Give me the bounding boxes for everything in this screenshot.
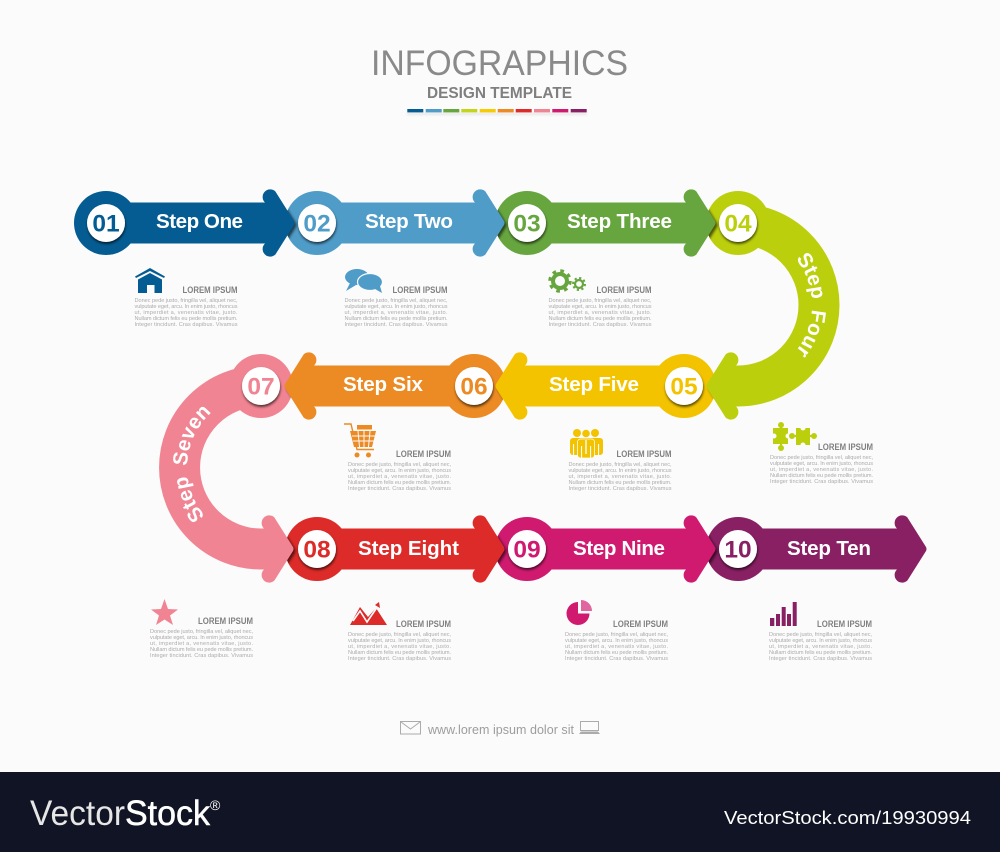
title bbox=[371, 44, 628, 102]
text block: step 3: vulputate eget, arcu. In enim justo, rhoncus bbox=[548, 304, 652, 310]
icon: home bbox=[135, 268, 165, 293]
text block: step 7: Nullam dictum felis eu pede mollis pretium. bbox=[150, 647, 253, 653]
text block: step 4: LOREM IPSUM bbox=[818, 442, 873, 452]
step 3 arrow: 03 bbox=[513, 210, 541, 238]
text block: step 6: ut, imperdiet a, venenatis vitae, justo. bbox=[348, 474, 451, 480]
text block: step 1 bbox=[134, 285, 238, 328]
text block: step 10: Nullam dictum felis eu pede mollis pretium. bbox=[769, 650, 872, 656]
text block: step 8: Donec pede justo, fringilla vel, aliquet nec, bbox=[348, 632, 451, 638]
step 1 arrow bbox=[74, 189, 294, 257]
icon: star bbox=[151, 599, 178, 625]
text block: step 2: Donec pede justo, fringilla vel, aliquet nec, bbox=[344, 298, 448, 304]
text block: step 6 bbox=[348, 449, 451, 492]
step 2 arrow bbox=[288, 189, 504, 257]
text block: step 3 bbox=[548, 285, 652, 328]
text block: step 4: Integer tincidunt. Cras dapibus. Vivamus bbox=[770, 479, 873, 485]
text block: step 1: Donec pede justo, fringilla vel, aliquet nec, bbox=[134, 298, 238, 304]
text block: step 9 bbox=[565, 619, 668, 662]
text block: step 9: LOREM IPSUM bbox=[613, 619, 668, 629]
colour legend bars bbox=[407, 109, 587, 115]
text block: step 4: vulputate eget, arcu. In enim justo, rhoncus bbox=[770, 461, 873, 467]
text block: step 1: Nullam dictum felis eu pede mollis pretium. bbox=[134, 316, 238, 322]
text block: step 9: ut, imperdiet a, venenatis vitae, justo. bbox=[565, 644, 668, 650]
text block: step 2: Integer tincidunt. Cras dapibus. Vivamus bbox=[344, 322, 448, 328]
step 2 arrow: Step Two bbox=[365, 210, 453, 233]
text block: step 10 bbox=[769, 619, 872, 662]
text block: step 1: vulputate eget, arcu. In enim justo, rhoncus bbox=[134, 304, 238, 310]
text block: step 5: Donec pede justo, fringilla vel, aliquet nec, bbox=[568, 462, 672, 468]
text block: step 8: Nullam dictum felis eu pede mollis pretium. bbox=[348, 650, 451, 656]
step 9 arrow: 09 bbox=[513, 536, 541, 564]
text block: step 7: LOREM IPSUM bbox=[198, 616, 253, 626]
text block: step 2: vulputate eget, arcu. In enim justo, rhoncus bbox=[344, 304, 448, 310]
text block: step 2: ut, imperdiet a, venenatis vitae, justo. bbox=[344, 310, 448, 316]
text block: step 10: Integer tincidunt. Cras dapibus. Vivamus bbox=[769, 656, 872, 662]
text block: step 7: ut, imperdiet a, venenatis vitae, justo. bbox=[150, 641, 253, 647]
text block: step 9: Integer tincidunt. Cras dapibus. Vivamus bbox=[565, 656, 668, 662]
step 7 curved arrow: 07 bbox=[247, 374, 275, 400]
text block: step 7: Donec pede justo, fringilla vel, aliquet nec, bbox=[150, 629, 253, 635]
step 10 arrow: 10 bbox=[724, 536, 752, 564]
step 9 arrow bbox=[498, 515, 716, 583]
text block: step 8: LOREM IPSUM bbox=[396, 619, 451, 629]
step 5 arrow: 05 bbox=[670, 374, 698, 400]
text block: step 8 bbox=[348, 619, 451, 662]
text block: step 2 bbox=[344, 285, 448, 328]
icon: laptop bbox=[579, 722, 600, 734]
text block: step 9: Donec pede justo, fringilla vel, aliquet nec, bbox=[565, 632, 668, 638]
icon: envelope bbox=[400, 722, 420, 734]
step 7 curved arrow bbox=[159, 354, 294, 583]
step 3 arrow: Step Three bbox=[567, 210, 672, 233]
text block: step 5 bbox=[568, 449, 672, 492]
step 6 arrow: 06 bbox=[460, 374, 488, 400]
text block: step 7: Integer tincidunt. Cras dapibus. Vivamus bbox=[150, 653, 253, 659]
icon: pie chart bbox=[566, 600, 592, 625]
step 8 arrow: Step Eight bbox=[358, 537, 459, 560]
text block: step 5: ut, imperdiet a, venenatis vitae, justo. bbox=[568, 474, 672, 480]
text block: step 3: Nullam dictum felis eu pede mollis pretium. bbox=[548, 316, 652, 322]
text block: step 5: vulputate eget, arcu. In enim justo, rhoncus bbox=[568, 468, 672, 474]
text block: step 8: Integer tincidunt. Cras dapibus. Vivamus bbox=[348, 656, 451, 662]
text block: step 10: LOREM IPSUM bbox=[817, 619, 872, 629]
step 2 arrow: 02 bbox=[303, 210, 331, 238]
text block: step 2: Nullam dictum felis eu pede mollis pretium. bbox=[344, 316, 448, 322]
icon: gears bbox=[550, 271, 585, 291]
step 8 arrow bbox=[287, 515, 504, 583]
text block: step 7: vulputate eget, arcu. In enim justo, rhoncus bbox=[150, 635, 253, 641]
text block: step 6: LOREM IPSUM bbox=[396, 449, 451, 459]
text block: step 1: LOREM IPSUM bbox=[182, 285, 238, 295]
text block: step 9: vulputate eget, arcu. In enim justo, rhoncus bbox=[565, 638, 668, 644]
step 8 arrow: 08 bbox=[303, 536, 331, 564]
step 1 arrow: 01 bbox=[92, 210, 120, 238]
text block: step 8: ut, imperdiet a, venenatis vitae, justo. bbox=[348, 644, 451, 650]
step 7 curved arrow: Step Seven bbox=[173, 406, 210, 522]
icon: shopping cart bbox=[344, 424, 376, 458]
text block: step 8: vulputate eget, arcu. In enim justo, rhoncus bbox=[348, 638, 451, 644]
text block: step 3: LOREM IPSUM bbox=[596, 285, 652, 295]
icon: bar chart bbox=[770, 602, 797, 626]
text block: step 4: Nullam dictum felis eu pede mollis pretium. bbox=[770, 473, 873, 479]
step 10 arrow bbox=[708, 515, 926, 583]
step 4 curved arrow bbox=[706, 191, 840, 420]
text block: step 6: Nullam dictum felis eu pede mollis pretium. bbox=[348, 480, 451, 486]
icon: puzzle pieces bbox=[772, 422, 817, 451]
step 4 curved arrow: 04 bbox=[724, 210, 752, 238]
text block: step 4: Donec pede justo, fringilla vel, aliquet nec, bbox=[770, 455, 873, 461]
text block: step 6: Donec pede justo, fringilla vel, aliquet nec, bbox=[348, 462, 451, 468]
text block: step 4: ut, imperdiet a, venenatis vitae, justo. bbox=[770, 467, 873, 473]
text block: step 2: LOREM IPSUM bbox=[392, 285, 448, 295]
text block: step 6: Integer tincidunt. Cras dapibus. Vivamus bbox=[348, 486, 451, 492]
text block: step 1: Integer tincidunt. Cras dapibus. Vivamus bbox=[134, 322, 238, 328]
text block: step 4 bbox=[770, 442, 873, 485]
text block: step 1: ut, imperdiet a, venenatis vitae, justo. bbox=[134, 310, 238, 316]
icon: chat bubbles bbox=[345, 269, 382, 293]
text block: step 5: LOREM IPSUM bbox=[616, 449, 672, 459]
text block: step 10: Donec pede justo, fringilla vel, aliquet nec, bbox=[769, 632, 872, 638]
icon: people bbox=[570, 429, 603, 458]
step 3 arrow bbox=[498, 189, 716, 257]
text block: step 10: ut, imperdiet a, venenatis vitae, justo. bbox=[769, 644, 872, 650]
step 10 arrow: Step Ten bbox=[787, 537, 871, 560]
subtitle: DESIGN TEMPLATE bbox=[427, 85, 572, 102]
step 4 curved arrow: Step Four bbox=[798, 253, 826, 358]
text block: step 5: Nullam dictum felis eu pede mollis pretium. bbox=[568, 480, 672, 486]
text block: step 5: Integer tincidunt. Cras dapibus. Vivamus bbox=[568, 486, 672, 492]
text block: step 10: vulputate eget, arcu. In enim justo, rhoncus bbox=[769, 638, 872, 644]
icon: mountain chart bbox=[350, 602, 387, 625]
text block: step 7 bbox=[150, 616, 253, 659]
text block: step 3: Donec pede justo, fringilla vel, aliquet nec, bbox=[548, 298, 652, 304]
step 9 arrow: Step Nine bbox=[573, 537, 665, 560]
footer image id: VectorStock.com/19930994 bbox=[724, 808, 971, 828]
website text: www.lorem ipsum dolor sit bbox=[427, 723, 575, 737]
title: INFOGRAPHICS bbox=[371, 44, 628, 83]
text block: step 9: Nullam dictum felis eu pede mollis pretium. bbox=[565, 650, 668, 656]
text block: step 3: Integer tincidunt. Cras dapibus. Vivamus bbox=[548, 322, 652, 328]
step 6 arrow: Step Six bbox=[343, 373, 424, 396]
step 5 arrow bbox=[496, 352, 714, 420]
footer logo: Stock bbox=[125, 794, 210, 833]
step 6 arrow bbox=[284, 352, 504, 420]
footer logo: Vector bbox=[30, 794, 125, 833]
footer logo: ® bbox=[210, 797, 221, 813]
text block: step 6: vulputate eget, arcu. In enim justo, rhoncus bbox=[348, 468, 451, 474]
text block: step 3: ut, imperdiet a, venenatis vitae, justo. bbox=[548, 310, 652, 316]
step 1 arrow: Step One bbox=[156, 210, 243, 233]
footer logo bbox=[30, 794, 221, 833]
step 5 arrow: Step Five bbox=[549, 373, 639, 396]
footer bar bbox=[0, 772, 1000, 852]
